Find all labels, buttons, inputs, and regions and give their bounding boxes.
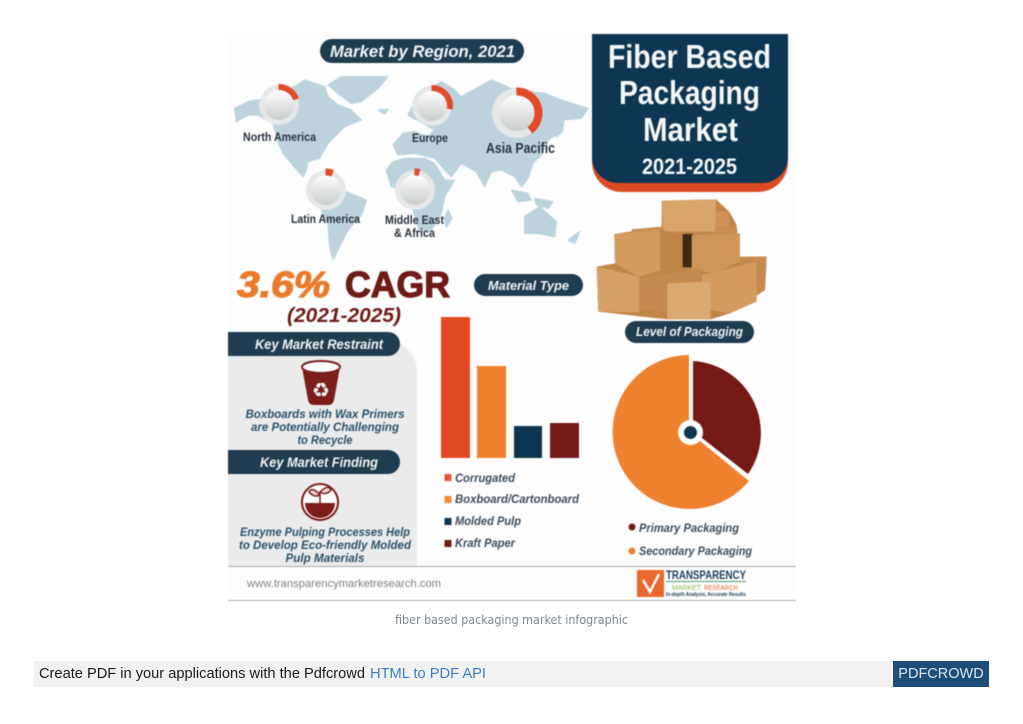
donut: Europe: [412, 86, 452, 145]
donut: Middle East and Africa: Middle East: [385, 213, 444, 227]
text: market restraint: are Potentially Challenging: [251, 422, 399, 434]
logo: Transparency Market Research: [637, 570, 746, 598]
caption: fiber based packaging market infographic: [395, 612, 628, 627]
legend: level of packaging: [628, 521, 753, 558]
pill: Material Type: [474, 274, 583, 296]
text: website: www.transparencymarketresearch.com: [246, 578, 441, 590]
world map: [235, 77, 588, 260]
title block: Packaging: [619, 74, 760, 111]
text: market restraint: to Recycle: [298, 435, 353, 447]
pill: Market by Region: [320, 39, 524, 63]
legend: material type: Kraft Paper: [455, 536, 516, 550]
text: market finding: Enzyme Pulping Processes Help: [240, 527, 410, 539]
heading: Key Market Restraint: [228, 332, 400, 356]
legend: material type: [444, 471, 580, 550]
icon: recycling bin: [302, 361, 340, 405]
donut: Latin America: [291, 170, 360, 226]
text: market restraint: Boxboards with Wax Primers: [246, 409, 404, 421]
pill: Level of Packaging: [625, 321, 754, 343]
logo: Transparency Market Research: TRANSPARENCY: [666, 570, 746, 582]
donut: North America: [243, 85, 316, 144]
donut: Latin America: Latin America: [291, 212, 360, 226]
legend: level of packaging: Primary Packaging: [639, 521, 740, 535]
pill: Material Type: Material Type: [488, 278, 569, 293]
title block: Market: [643, 111, 738, 148]
legend: material type: Corrugated: [455, 471, 516, 485]
legend: level of packaging: Secondary Packaging: [639, 544, 753, 558]
footer bar: Create PDF in your applications with the Pdfcrowd: [39, 666, 365, 682]
heading: Key Market Finding: [228, 450, 400, 474]
icon: recycling bin: ♻: [312, 378, 330, 402]
infographic: [228, 34, 796, 601]
headline: CAGR: [237, 264, 450, 327]
icon: cardboard boxes: [597, 199, 767, 319]
headline: CAGR: 3.6%: [237, 264, 330, 305]
donut: North America: North America: [243, 130, 316, 144]
headline: CAGR: CAGR: [345, 264, 450, 305]
title block: Fiber Based: [608, 38, 771, 75]
panel: market restraint and finding: [228, 340, 417, 566]
legend: material type: Molded Pulp: [455, 514, 521, 528]
logo: Transparency Market Research: In-depth Analysis, Accurate Results: [666, 592, 746, 598]
pill: Level of Packaging: Level of Packaging: [636, 324, 743, 339]
donut: Middle East and Africa: [385, 170, 444, 240]
footer bar: HTML to PDF API: [370, 666, 486, 682]
donut: Asia Pacific: [486, 88, 555, 157]
legend: material type: Boxboard/Cartonboard: [455, 492, 580, 506]
donut: Asia Pacific: Asia Pacific: [486, 141, 555, 157]
footer bar: [34, 661, 989, 687]
heading: Key Market Finding: Key Market Finding: [260, 455, 379, 470]
donut: Middle East and Africa: & Africa: [394, 226, 435, 240]
headline: CAGR: (2021-2025): [287, 304, 401, 327]
footer bar: PDFCROWD: [898, 666, 984, 682]
title block: [592, 34, 788, 192]
panel: infographic background: [228, 34, 796, 600]
title block: 2021-2025: [642, 154, 737, 179]
logo: Transparency Market Research: RESEARCH: [704, 585, 738, 592]
heading: Key Market Restraint: Key Market Restraint: [255, 337, 383, 352]
text: market finding: to Develop Eco-friendly Molded: [239, 540, 412, 552]
pill: Market by Region: Market by Region, 2021: [330, 43, 515, 61]
pie chart: level of packaging: [613, 355, 761, 509]
donut: Europe: Europe: [412, 131, 448, 145]
icon: plant and globe: [302, 484, 338, 520]
text: market restraint: [246, 409, 404, 447]
text: market finding: [239, 527, 412, 565]
bar chart: material type: [441, 317, 579, 458]
text: market finding: Pulp Materials: [286, 553, 364, 565]
logo: Transparency Market Research: MARKET: [672, 585, 702, 592]
